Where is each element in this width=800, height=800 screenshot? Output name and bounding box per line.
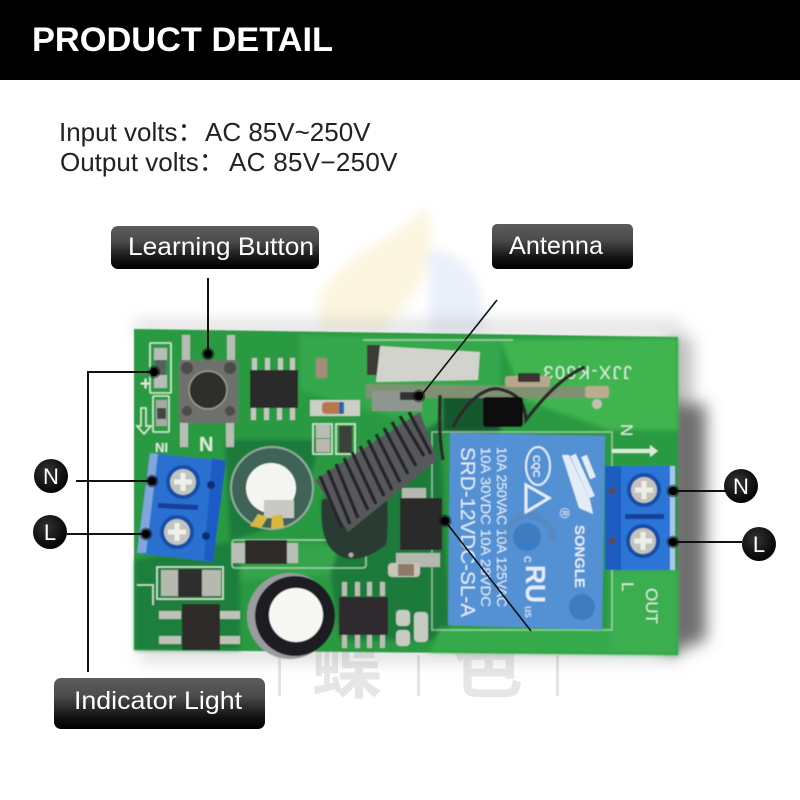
blue relay: 10A 30VDC 10A 28VDC — [478, 447, 494, 607]
callout leader lines — [67, 278, 742, 672]
input volts: Input volts： — [59, 117, 204, 147]
watermark characters and rules: 色 — [453, 612, 523, 713]
badge: L right — [742, 527, 776, 561]
blue relay: SRD-12VDC-SL-A — [456, 447, 478, 618]
SMD diode — [232, 540, 298, 564]
inductor base — [321, 480, 388, 559]
badge: N left: N — [43, 464, 59, 489]
silkscreen markings — [137, 340, 612, 630]
output volts: Output volts： — [60, 147, 225, 177]
upper IC chip — [250, 358, 298, 420]
board light copper areas — [135, 335, 678, 655]
leader: indicator light — [88, 372, 154, 672]
relay logos: RU — [520, 565, 551, 603]
badge: L left: L — [44, 520, 56, 545]
label: learning button: Learning Button — [128, 233, 314, 261]
leader: L left — [67, 533, 146, 535]
lower right SMD pads — [396, 610, 428, 646]
ceramic capacitor — [388, 563, 420, 577]
mirrored labels on the right: JJX-K603 — [542, 362, 632, 382]
regulator chip — [159, 604, 240, 650]
heading: product detail: PRODUCT DETAIL — [32, 21, 333, 59]
silkscreen labels — [137, 362, 661, 624]
output volts: AC 85V−250V — [229, 147, 398, 177]
watermark characters and rules — [278, 612, 559, 713]
relay logos — [520, 447, 593, 618]
silkscreen labels: OUT — [642, 588, 661, 624]
blue relay — [448, 433, 605, 630]
label: antenna: Antenna — [509, 232, 603, 260]
RF receiver module — [366, 346, 610, 411]
relay watermark marks — [505, 516, 595, 620]
relay logos: c — [521, 556, 536, 563]
watermark characters and rules: 蝶 — [312, 612, 382, 713]
power inductor — [161, 569, 221, 597]
left terminal block — [137, 453, 226, 562]
silkscreen labels: + — [140, 374, 151, 395]
left LED pads — [154, 348, 167, 426]
label: antenna — [492, 224, 633, 269]
relay logos: ® — [557, 508, 573, 519]
label: learning button — [111, 226, 319, 269]
leader: N left — [76, 480, 152, 482]
leader: N right — [673, 490, 725, 492]
badge: N left — [34, 459, 68, 493]
blue relay: 10A 250VAC 10A 125VAC — [494, 447, 510, 607]
right terminal block — [605, 466, 675, 570]
label: indicator light: Indicator Light — [74, 687, 242, 715]
relay logos: SONGLE — [572, 525, 588, 588]
label: indicator light — [54, 678, 265, 729]
leader end dots — [142, 350, 678, 546]
silkscreen labels: NI — [155, 440, 168, 455]
middle IC — [396, 488, 442, 567]
header bar — [0, 0, 800, 80]
badge: N right — [724, 469, 758, 503]
watermark logo — [318, 205, 484, 335]
silkscreen labels: L — [618, 582, 637, 591]
inductor coil antenna — [315, 367, 585, 532]
antenna wire — [440, 367, 585, 460]
leader: learning button — [207, 278, 209, 354]
input volts: AC 85V~250V — [205, 117, 371, 147]
relay logos: CQC — [530, 455, 541, 477]
badge: L right: L — [753, 532, 765, 557]
badge: L left — [33, 515, 67, 549]
lower electrolytic capacitor — [247, 573, 335, 659]
silkscreen labels: N — [199, 434, 213, 456]
diode and small SMD parts — [310, 345, 381, 453]
board shadow — [135, 322, 706, 659]
learning push button — [179, 335, 238, 447]
leader: L right — [673, 541, 742, 543]
badge: N right: N — [733, 474, 749, 499]
circuit board — [134, 329, 678, 659]
upper electrolytic capacitor — [231, 447, 313, 529]
relay logos: us — [522, 606, 534, 618]
voltage specifications — [59, 117, 398, 177]
leader: relay — [445, 521, 531, 631]
silkscreen labels: N — [617, 424, 636, 436]
leader: antenna — [420, 300, 497, 397]
lower IC chip — [339, 582, 388, 648]
